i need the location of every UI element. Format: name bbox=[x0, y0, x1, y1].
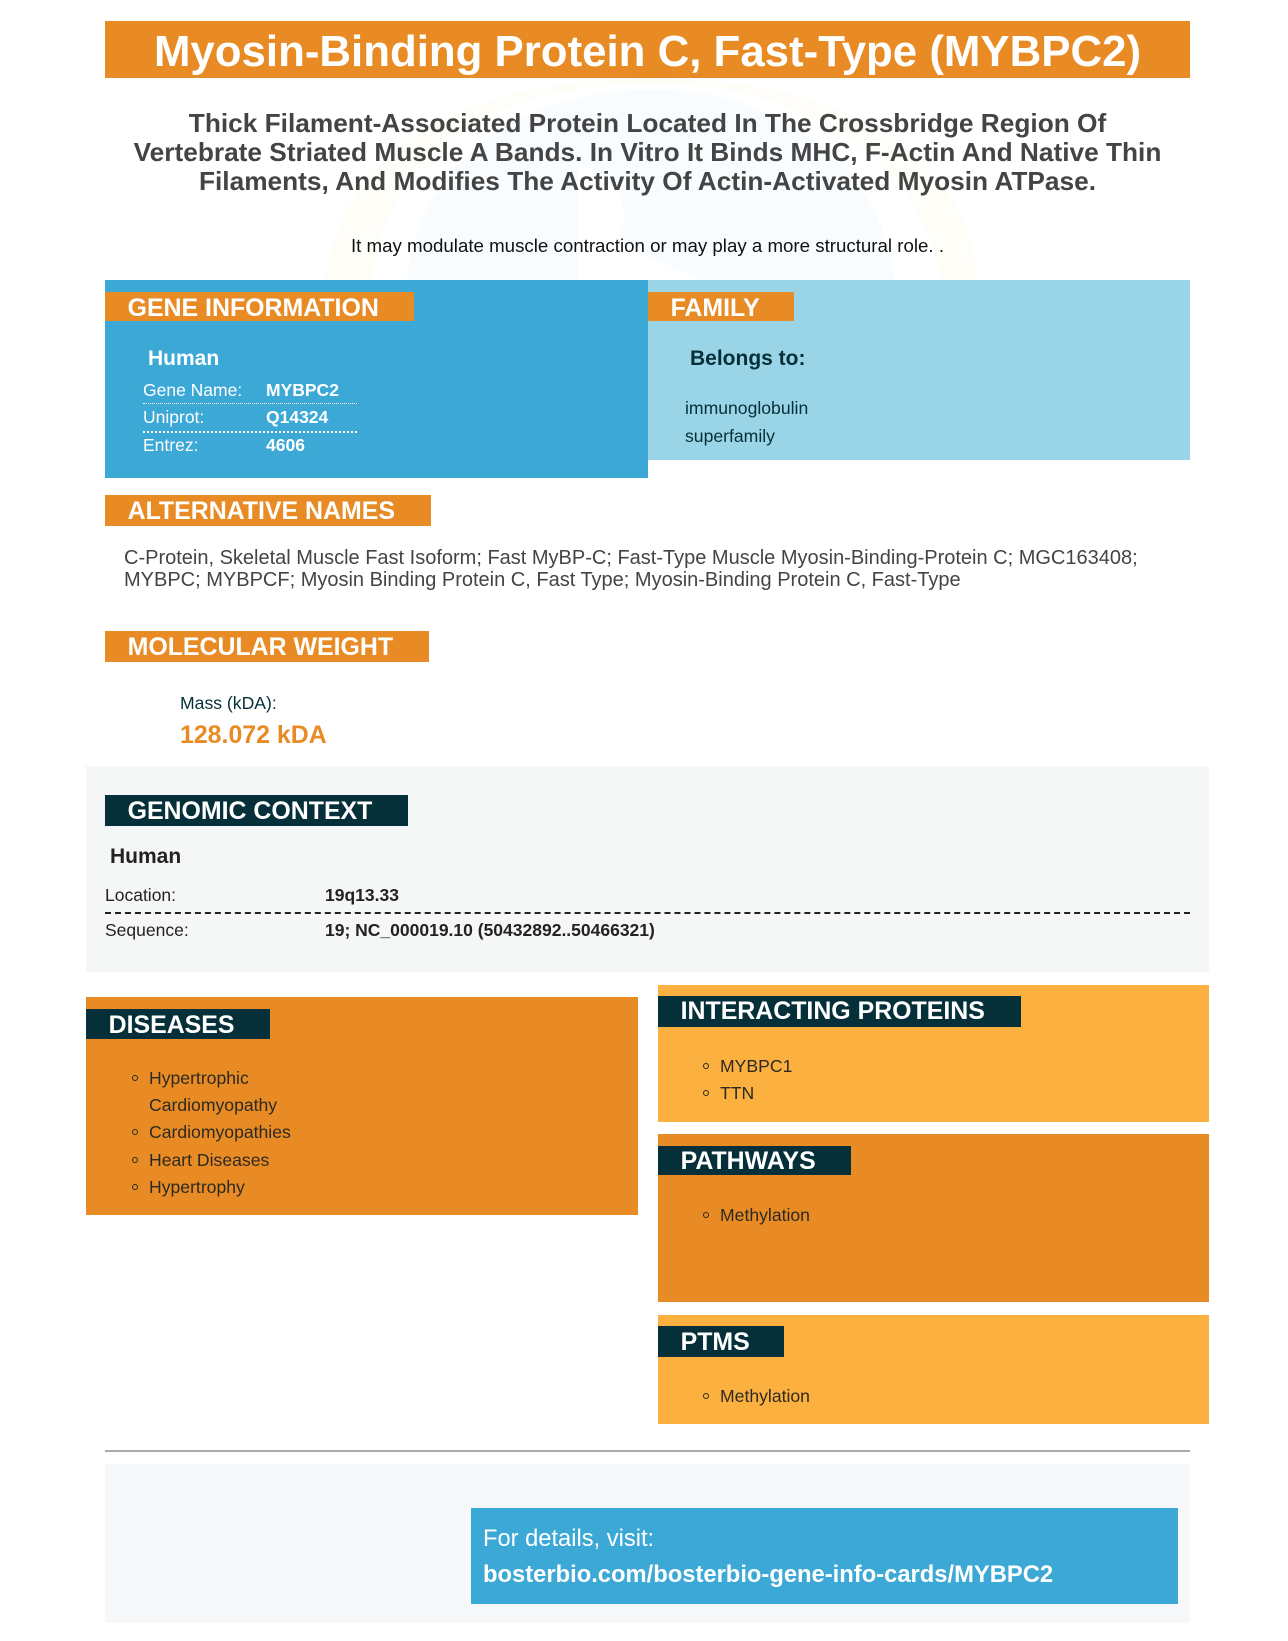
gene name row bbox=[143, 379, 357, 404]
callout: details link bbox=[471, 1508, 1178, 1604]
panel: genomic context: 19; NC_000019.10 (50432892..50466321) bbox=[325, 920, 655, 940]
interacting proteins list: TTN bbox=[720, 1083, 754, 1103]
watermark logo bbox=[300, 70, 1000, 280]
callout label: For details, visit: bbox=[483, 1526, 654, 1552]
alternative names text: C-Protein, Skeletal Muscle Fast Isoform; Fast MyBP-C; Fast-Type Muscle Myosin-Binding-Protein C; MGC163408; bbox=[124, 547, 1138, 569]
heading: ptms bbox=[658, 1326, 784, 1357]
panel: ptms bbox=[658, 1315, 1209, 1424]
interacting proteins list bbox=[703, 1056, 792, 1103]
mass value: 128.072 kDA bbox=[180, 721, 327, 749]
family name: superfamily bbox=[685, 426, 775, 446]
heading: interacting proteins: INTERACTING PROTEINS bbox=[681, 997, 985, 1025]
uniprot row: Uniprot: bbox=[143, 407, 204, 427]
heading: diseases: DISEASES bbox=[109, 1011, 234, 1039]
panel: footer bbox=[105, 1464, 1190, 1623]
diseases list: Cardiomyopathies bbox=[149, 1122, 291, 1142]
location row bbox=[105, 884, 1190, 914]
heading: molecular weight: MOLECULAR WEIGHT bbox=[128, 633, 393, 661]
species label: Human bbox=[148, 347, 219, 370]
location row: 19q13.33 bbox=[325, 885, 399, 905]
subtitle: Filaments, And Modifies The Activity Of Actin-Activated Myosin ATPase. bbox=[199, 166, 1096, 196]
alternative names text: MYBPC; MYBPCF; Myosin Binding Protein C, Fast Type; Myosin-Binding Protein C, Fast-Type bbox=[124, 568, 961, 590]
uniprot row: Q14324 bbox=[266, 407, 328, 427]
family name: immunoglobulin bbox=[685, 398, 808, 418]
diseases list: Cardiomyopathy bbox=[149, 1095, 277, 1115]
pathways list: Methylation bbox=[720, 1205, 810, 1225]
alternative names text bbox=[124, 547, 1138, 590]
heading: alternative names: ALTERNATIVE NAMES bbox=[128, 497, 395, 525]
species label: Human bbox=[110, 845, 181, 868]
panel: family bbox=[648, 280, 1190, 460]
subtitle bbox=[134, 108, 1161, 196]
sequence row bbox=[105, 920, 655, 940]
heading: pathways bbox=[658, 1146, 851, 1175]
subtitle: Vertebrate Striated Muscle A Bands. In Vitro It Binds MHC, F-Actin And Native Thin bbox=[134, 137, 1161, 167]
panel: genomic context bbox=[86, 766, 1209, 972]
heading: ptms: PTMS bbox=[681, 1328, 750, 1356]
ptms list: Methylation bbox=[720, 1386, 810, 1406]
belongs to label: Belongs to: bbox=[690, 347, 806, 370]
sequence row: Sequence: bbox=[105, 920, 189, 940]
heading: diseases bbox=[86, 1009, 270, 1039]
diseases list bbox=[132, 1068, 291, 1197]
panel: interacting proteins bbox=[658, 985, 1209, 1122]
gene name row: Gene Name: bbox=[143, 380, 242, 400]
interacting proteins list: MYBPC1 bbox=[720, 1056, 792, 1076]
diseases list: Heart Diseases bbox=[149, 1150, 269, 1170]
heading: family: FAMILY bbox=[671, 294, 760, 322]
entrez row: 4606 bbox=[266, 435, 305, 455]
callout url: bosterbio.com/bosterbio-gene-info-cards/MYBPC2 bbox=[483, 1561, 1053, 1588]
gene name row: MYBPC2 bbox=[266, 380, 339, 400]
entrez row: Entrez: bbox=[143, 435, 198, 455]
heading: genomic context: GENOMIC CONTEXT bbox=[128, 797, 372, 825]
heading: pathways: PATHWAYS bbox=[681, 1147, 816, 1175]
diseases list: Hypertrophy bbox=[149, 1177, 245, 1197]
mass label: Mass (kDA): bbox=[180, 693, 277, 713]
subtitle: Thick Filament-Associated Protein Located In The Crossbridge Region Of bbox=[189, 108, 1106, 138]
description: It may modulate muscle contraction or may play a more structural role. . bbox=[351, 235, 944, 256]
panel: pathways bbox=[658, 1134, 1209, 1302]
uniprot row bbox=[143, 406, 357, 433]
diseases list: Hypertrophic bbox=[149, 1068, 249, 1088]
title: Myosin-Binding Protein C, Fast-Type (MYBPC2) bbox=[154, 27, 1141, 76]
panel: gene information bbox=[105, 280, 648, 478]
family name bbox=[685, 398, 808, 446]
heading: gene information: GENE INFORMATION bbox=[128, 294, 379, 322]
panel: diseases bbox=[86, 997, 638, 1215]
heading: family bbox=[648, 292, 794, 321]
entrez row bbox=[143, 435, 305, 455]
location row: Location: bbox=[105, 885, 176, 905]
